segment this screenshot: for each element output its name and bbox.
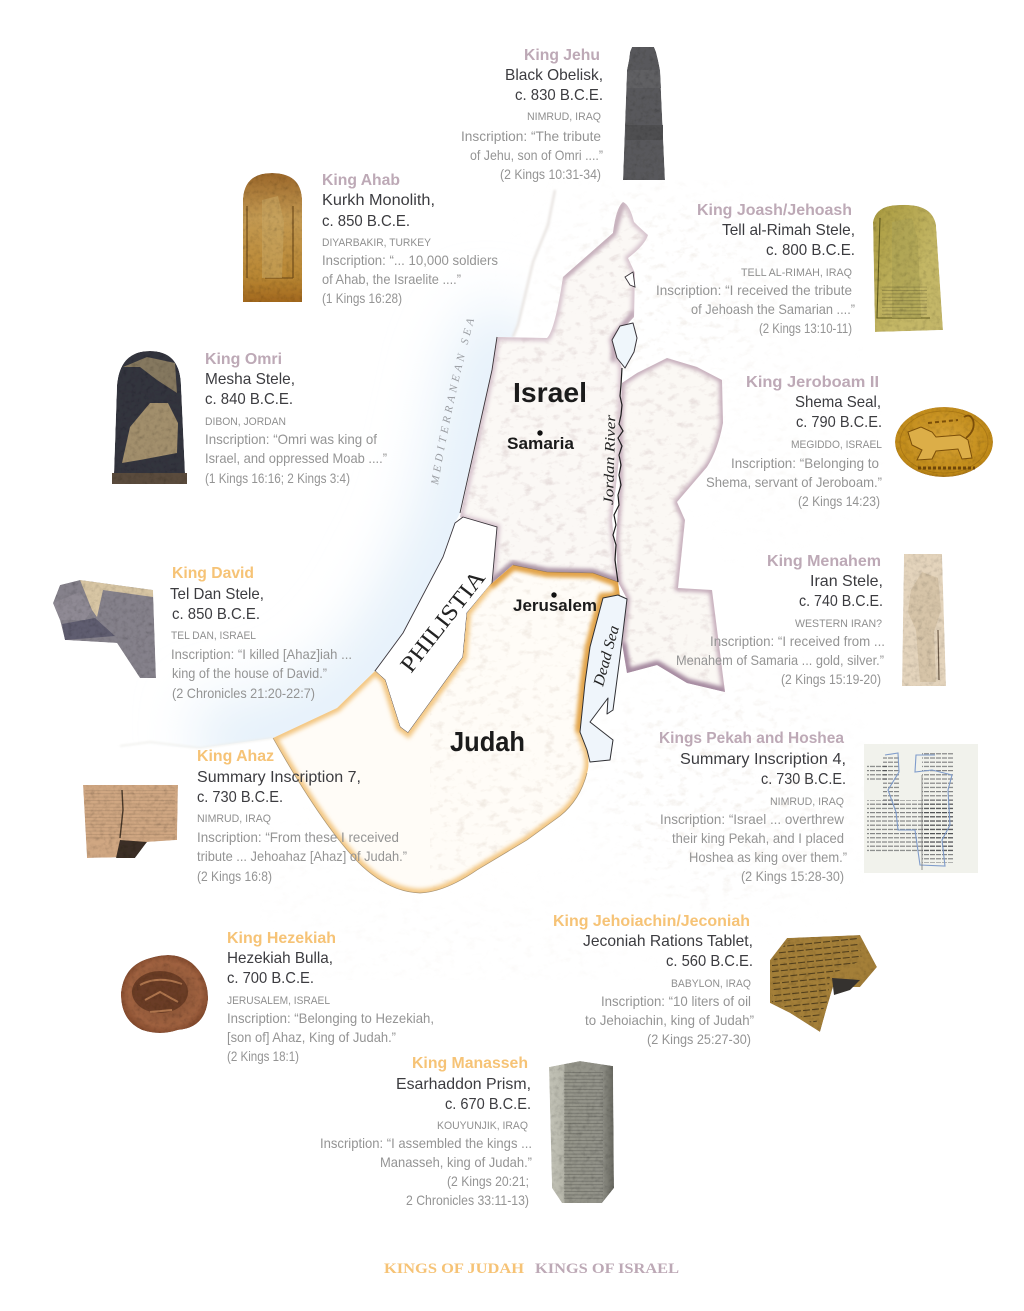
- caption: TELL AL-RIMAH, IRAQ: [741, 267, 852, 279]
- label: Judah: Judah: [450, 726, 525, 757]
- caption: c. 730 B.C.E.: [761, 771, 846, 788]
- faint terrain outside the kingdoms: [558, 205, 832, 892]
- caption: [656, 202, 855, 336]
- artifact: Jeconiah Rations Tablet: [770, 935, 877, 1032]
- caption: c. 830 B.C.E.: [515, 87, 603, 104]
- artifact: Tell al-Rimah Stele: [873, 205, 943, 332]
- caption: [son of] Ahaz, King of Judah.”: [227, 1029, 396, 1045]
- caption: Inscription: “Israel ... overthrew: [660, 811, 845, 827]
- Jordan River line: [613, 368, 623, 582]
- caption: [553, 913, 754, 1047]
- caption: c. 730 B.C.E.: [197, 789, 283, 806]
- caption: Inscription: “I killed [Ahaz]iah ...: [171, 646, 352, 662]
- label: Jordan River: Jordan River: [601, 414, 619, 505]
- panel: King Jeroboam II: [706, 374, 993, 509]
- panel: King Jehoiachin/Jeconiah: [553, 913, 877, 1047]
- caption: (2 Kings 16:8): [197, 868, 272, 884]
- caption: c. 840 B.C.E.: [205, 391, 293, 408]
- caption: (2 Kings 25:27-30): [647, 1031, 751, 1047]
- caption: Inscription: “Omri was king of: [205, 431, 377, 447]
- caption: c. 790 B.C.E.: [796, 414, 882, 431]
- artifact: Iran Stele: [902, 554, 946, 686]
- caption: Esarhaddon Prism,: [396, 1076, 531, 1093]
- panel: King Omri: [112, 351, 387, 486]
- caption: King Ahab: [322, 172, 400, 189]
- panel: King Jehu: [461, 47, 665, 182]
- artifact: Summary Inscription 4: [864, 744, 978, 873]
- caption: king of the house of David.”: [172, 665, 327, 681]
- region: Israel west of the Jordan: [460, 202, 648, 582]
- artifact: Kurkh Monolith: [243, 173, 302, 302]
- caption: their king Pekah, and I placed: [672, 830, 844, 846]
- caption: (2 Kings 15:28-30): [741, 868, 844, 884]
- caption: Hoshea as king over them.”: [689, 849, 847, 865]
- caption: Inscription: “I received from ...: [710, 633, 885, 649]
- caption: Tell al-Rimah Stele,: [722, 222, 855, 239]
- caption: c. 850 B.C.E.: [172, 606, 260, 623]
- caption: Mesha Stele,: [205, 371, 295, 388]
- caption: c. 700 B.C.E.: [227, 970, 314, 987]
- caption: DIBON, JORDAN: [205, 416, 286, 428]
- caption: King Ahaz: [197, 748, 274, 765]
- caption: Inscription: “Belonging to Hezekiah,: [227, 1010, 434, 1026]
- caption: [322, 172, 498, 306]
- caption: DIYARBAKIR, TURKEY: [322, 237, 432, 249]
- caption: (2 Chronicles 21:20-22:7): [172, 685, 315, 701]
- caption: c. 850 B.C.E.: [322, 213, 410, 230]
- caption: [706, 374, 882, 509]
- caption: NIMRUD, IRAQ: [197, 813, 271, 825]
- caption: JERUSALEM, ISRAEL: [227, 995, 330, 1007]
- caption: (2 Kings 10:31-34): [500, 166, 601, 182]
- caption: Jeconiah Rations Tablet,: [583, 933, 753, 950]
- caption: Black Obelisk,: [505, 67, 603, 84]
- caption: Hezekiah Bulla,: [227, 950, 333, 967]
- caption: c. 560 B.C.E.: [666, 953, 753, 970]
- region: Judah: [273, 565, 620, 893]
- caption: [227, 930, 434, 1064]
- lake: Hula: [625, 272, 635, 287]
- label: Philistia: PHILISTIA: [395, 565, 490, 677]
- caption: (2 Kings 13:10-11): [759, 320, 852, 336]
- caption: [461, 47, 603, 182]
- artifact: Tel Dan Stele: [53, 580, 156, 678]
- artifact: Mesha Stele: [112, 351, 187, 484]
- artifact: Black Obelisk: [623, 47, 665, 180]
- caption: Inscription: “10 liters of oil: [601, 993, 751, 1009]
- caption: Kings Pekah and Hoshea: [659, 730, 844, 747]
- caption: (2 Kings 14:23): [798, 493, 880, 509]
- caption: Tel Dan Stele,: [170, 586, 264, 603]
- caption: Shema Seal,: [795, 394, 881, 411]
- panel: King Manasseh: [320, 1055, 614, 1208]
- caption: c. 800 B.C.E.: [766, 242, 855, 259]
- caption: of Ahab, the Israelite ....”: [322, 271, 461, 287]
- lake: Dead Sea: [580, 595, 627, 762]
- caption: King Jeroboam II: [746, 374, 879, 391]
- caption: Israel, and oppressed Moab ....”: [205, 450, 387, 466]
- caption: King David: [172, 565, 254, 582]
- caption: [205, 351, 387, 486]
- map: [121, 190, 832, 894]
- caption: King Jehu: [524, 47, 600, 64]
- caption: [197, 748, 407, 884]
- panel: Kings Pekah and Hoshea: [659, 730, 978, 884]
- caption: (2 Kings 15:19-20): [781, 671, 881, 687]
- caption: Menahem of Samaria ... gold, silver.”: [676, 652, 884, 668]
- caption: TEL DAN, ISRAEL: [171, 630, 256, 642]
- panel: King Ahab: [243, 172, 498, 306]
- caption: Summary Inscription 4,: [680, 751, 846, 768]
- sea: Mediterranean tint: [200, 320, 520, 748]
- caption: Iran Stele,: [810, 573, 883, 590]
- legend: KINGS OF ISRAEL: [535, 1261, 679, 1277]
- legend: KINGS OF JUDAH: [384, 1261, 524, 1277]
- caption: BABYLON, IRAQ: [671, 978, 751, 990]
- caption: MEGIDDO, ISRAEL: [791, 439, 882, 451]
- panel: King Joash/Jehoash: [656, 202, 943, 336]
- caption: to Jehoiachin, king of Judah”: [585, 1012, 754, 1028]
- caption: of Jehu, son of Omri ....”: [470, 147, 603, 163]
- caption: Inscription: “... 10,000 soldiers: [322, 252, 498, 268]
- region: Philistia: [375, 517, 497, 733]
- faint southern coastline: [120, 738, 273, 748]
- label: Samaria: Samaria: [507, 434, 575, 453]
- caption: Inscription: “The tribute: [461, 128, 601, 144]
- caption: (1 Kings 16:28): [322, 290, 402, 306]
- artifact: Hezekiah Bulla: [121, 955, 208, 1033]
- caption: (2 Kings 20:21;: [447, 1173, 529, 1189]
- caption: [170, 565, 352, 701]
- caption: (2 Kings 18:1): [227, 1048, 299, 1064]
- artifact: Esarhaddon Prism: [549, 1061, 614, 1203]
- caption: King Omri: [205, 351, 282, 368]
- panel: King David: [53, 565, 352, 701]
- caption: c. 740 B.C.E.: [799, 593, 883, 610]
- legend: [384, 1261, 679, 1277]
- label: Dead Sea: Dead Sea: [590, 623, 623, 689]
- panel: King Menahem: [676, 553, 946, 687]
- caption: [676, 553, 885, 687]
- caption: King Manasseh: [412, 1055, 528, 1072]
- caption: [320, 1055, 532, 1208]
- caption: Inscription: “Belonging to: [731, 455, 879, 471]
- caption: NIMRUD, IRAQ: [770, 796, 844, 808]
- caption: Inscription: “I received the tribute: [656, 282, 852, 298]
- caption: KOUYUNJIK, IRAQ: [437, 1120, 528, 1132]
- caption: Manasseh, king of Judah.”: [380, 1154, 532, 1170]
- caption: Inscription: “From these I received: [197, 829, 399, 845]
- artifact: Shema Seal: [895, 407, 993, 477]
- caption: (1 Kings 16:16; 2 Kings 3:4): [205, 470, 350, 486]
- lake: Sea of Galilee: [612, 323, 637, 368]
- caption: King Jehoiachin/Jeconiah: [553, 913, 750, 930]
- caption: WESTERN IRAN?: [795, 618, 882, 630]
- caption: [659, 730, 847, 884]
- caption: Kurkh Monolith,: [322, 192, 435, 209]
- faint northern coastline: [513, 190, 555, 337]
- caption: Inscription: “I assembled the kings ...: [320, 1135, 532, 1151]
- artifact: Summary Inscription 7: [83, 785, 178, 858]
- label: Mediterranean Sea: MEDITERRANEAN SEA: [431, 319, 474, 486]
- panel: King Ahaz: [83, 748, 407, 884]
- panel: King Hezekiah: [121, 930, 434, 1064]
- label: Israel: Israel: [513, 377, 587, 408]
- label: Jerusalem: Jerusalem: [513, 596, 597, 615]
- caption: Summary Inscription 7,: [197, 769, 361, 786]
- caption: King Hezekiah: [227, 930, 336, 947]
- caption: c. 670 B.C.E.: [445, 1096, 531, 1113]
- region: Israel east of the Jordan: [616, 358, 725, 692]
- caption: 2 Chronicles 33:11-13): [406, 1192, 529, 1208]
- caption: Shema, servant of Jeroboam.”: [706, 474, 882, 490]
- caption: King Joash/Jehoash: [697, 202, 852, 219]
- caption: NIMRUD, IRAQ: [527, 111, 601, 123]
- caption: tribute ... Jehoahaz [Ahaz] of Judah.”: [197, 848, 407, 864]
- caption: King Menahem: [767, 553, 881, 570]
- caption: of Jehoash the Samarian ....”: [691, 301, 855, 317]
